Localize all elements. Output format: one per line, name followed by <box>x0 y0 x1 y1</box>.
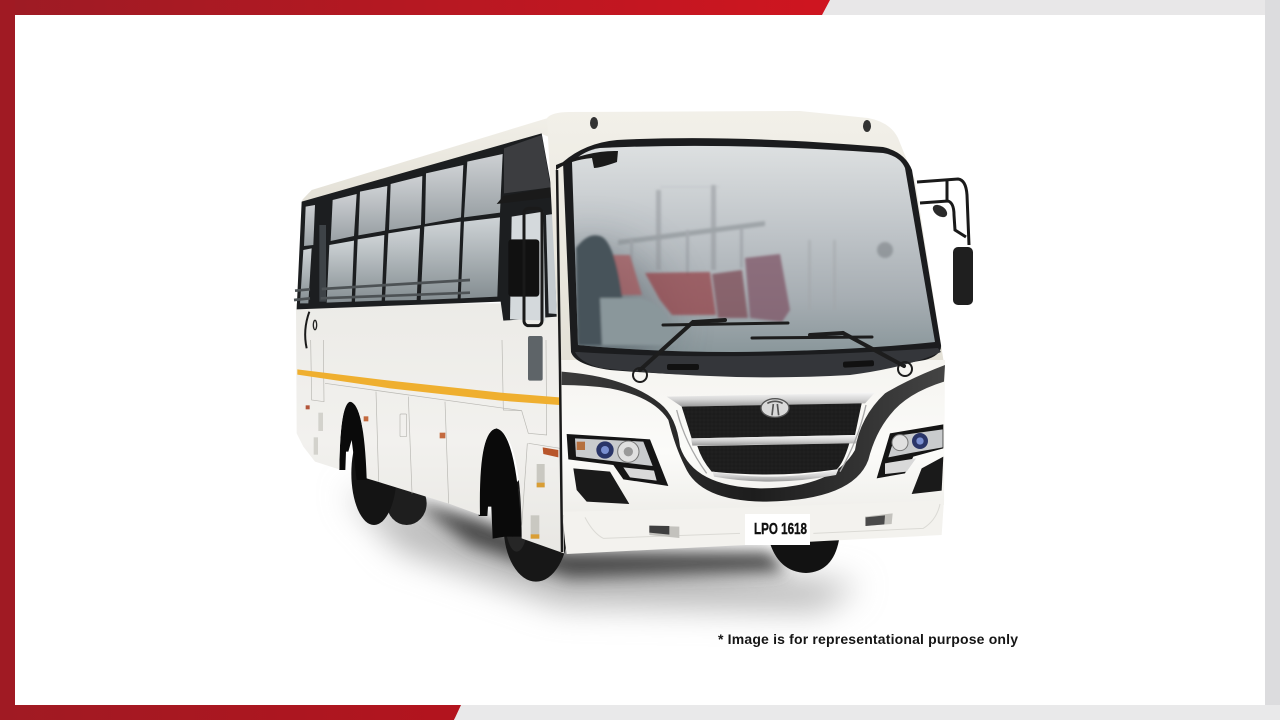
door mirror <box>508 239 539 297</box>
red seats <box>610 254 790 322</box>
rear arch interior <box>339 402 367 480</box>
number plate: LPO 1618 <box>754 521 807 538</box>
dash band <box>575 348 941 377</box>
roof marker lights <box>590 117 871 132</box>
rear door handle <box>305 312 309 348</box>
left wiper <box>633 320 788 382</box>
rear wheels <box>339 402 427 525</box>
side markers <box>306 405 558 539</box>
middle chrome bar <box>691 435 857 446</box>
disclaimer note: * Image is for representational purpose only <box>718 631 1018 647</box>
frame: bottom grey band <box>455 705 1280 720</box>
lower panes <box>300 217 500 303</box>
rear view mirror <box>556 151 618 170</box>
luggage panel lines <box>311 340 560 527</box>
frame: left red band <box>0 0 15 720</box>
front left wheel <box>479 428 568 582</box>
window guard rails <box>294 280 470 300</box>
right fog vent <box>912 457 943 494</box>
frame: right grey band <box>1265 0 1280 720</box>
door window slot <box>528 336 543 381</box>
bus illustration <box>294 111 973 610</box>
left side glass tint <box>574 224 682 350</box>
bumper fog slot left <box>649 526 679 538</box>
logo badge <box>761 399 789 417</box>
corner seam <box>557 170 562 552</box>
front arch interior <box>479 428 522 539</box>
dark upper panel <box>504 135 551 193</box>
front fascia <box>562 365 945 554</box>
side upper body and windows <box>294 113 557 348</box>
side body panel <box>296 303 564 553</box>
ground shadow <box>345 490 860 610</box>
front lower body <box>561 360 945 515</box>
yellow stripe <box>297 369 559 405</box>
frame: top grey band <box>820 0 1280 15</box>
door glass <box>510 212 545 321</box>
front roof cap <box>547 111 945 370</box>
frame: top red band <box>0 0 830 15</box>
rear door glass <box>319 225 326 302</box>
lower chrome bar <box>713 469 838 482</box>
windshield frame <box>563 138 941 376</box>
upper chrome bar <box>667 393 875 407</box>
front right wheel <box>769 540 839 573</box>
left headlight <box>567 434 668 486</box>
upper grille <box>682 403 862 438</box>
chrome grille sides <box>677 405 866 473</box>
frame: bottom red band <box>0 705 461 720</box>
exterior mirror assembly <box>917 179 973 305</box>
upper panes <box>304 154 503 246</box>
door visor <box>497 187 552 204</box>
number plate <box>745 514 810 545</box>
lower grille <box>697 443 849 475</box>
front bumper <box>563 500 944 554</box>
bumper fog slot right <box>865 513 893 526</box>
driver seat <box>576 235 675 345</box>
bumper crease <box>585 504 940 538</box>
left fog vent <box>573 468 629 504</box>
right wiper <box>752 333 912 376</box>
door rail loop <box>524 208 542 326</box>
windshield glass and interior <box>556 146 935 383</box>
roof side <box>302 113 557 203</box>
interior structure <box>618 184 894 272</box>
interior scene <box>574 184 894 350</box>
right headlight <box>877 424 943 478</box>
front face <box>547 111 945 552</box>
black U band <box>562 365 945 502</box>
window frame <box>297 133 557 321</box>
rear door latch <box>313 320 317 330</box>
dash handles <box>667 360 874 370</box>
